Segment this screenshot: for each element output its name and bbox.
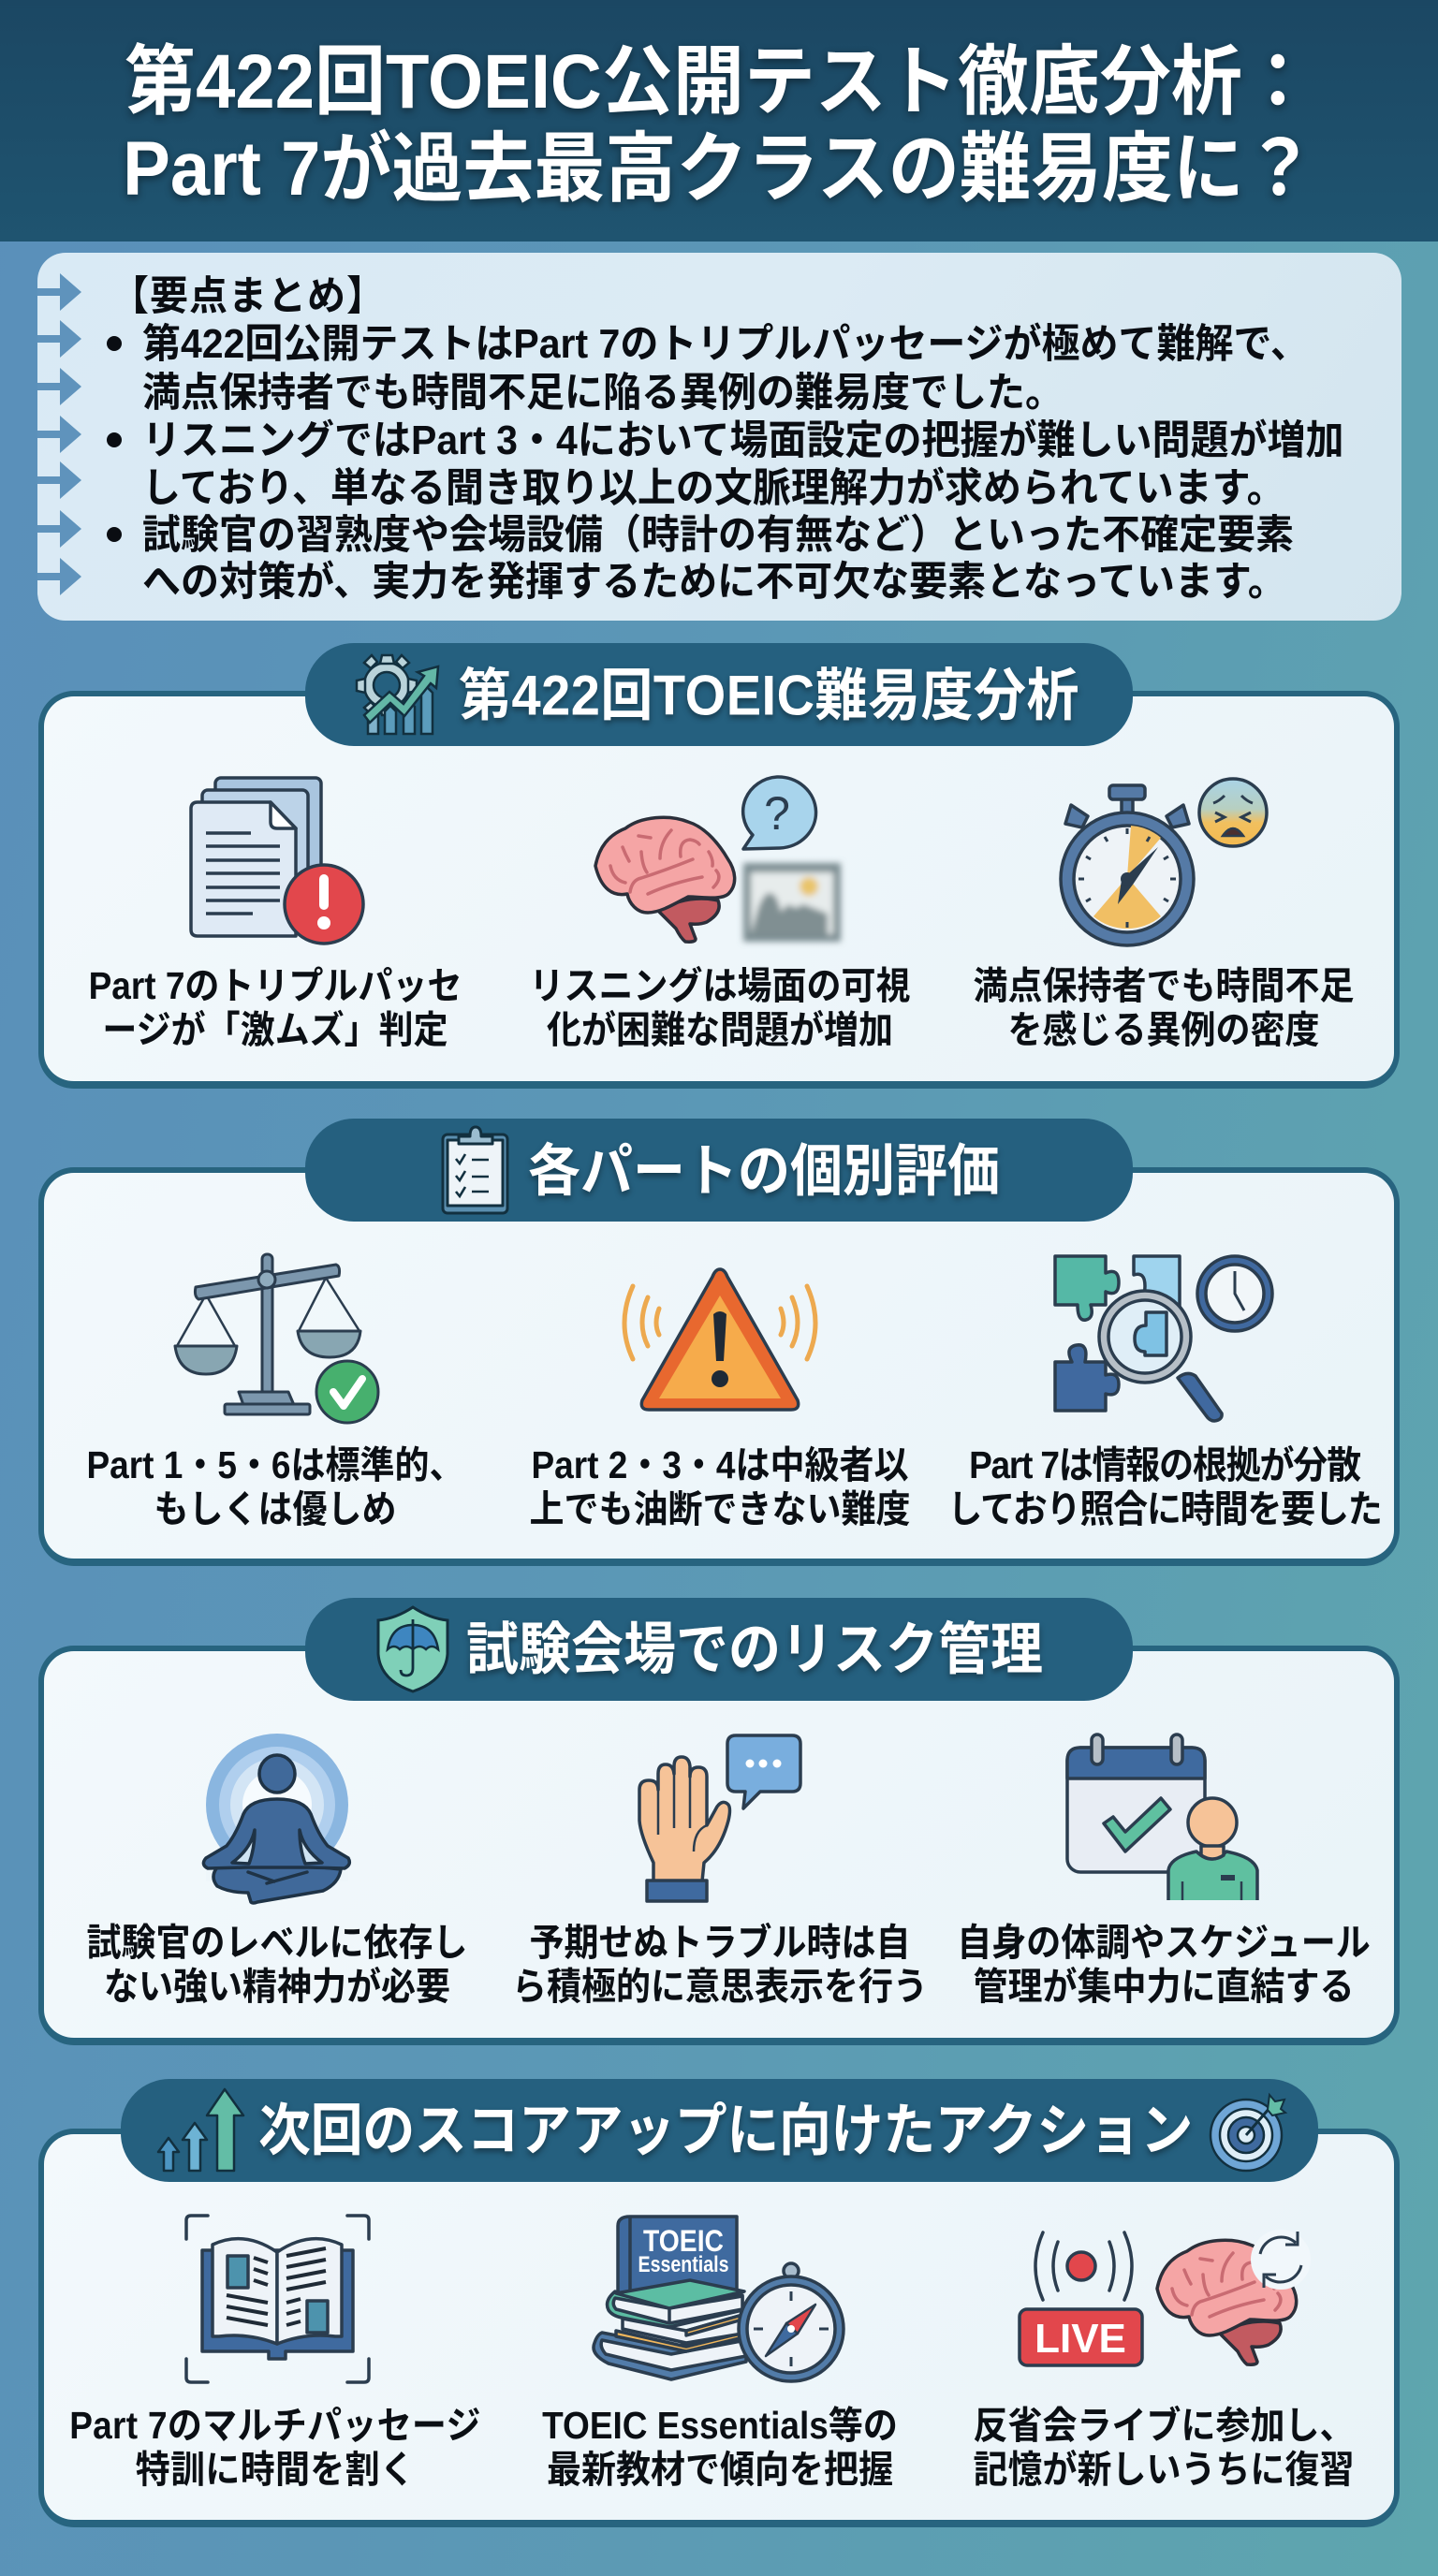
caption: TOEIC Essentials: TOEIC Essentials等の: [542, 2405, 898, 2447]
caption: health and schedule: 自身の体調やスケジュール: [957, 1922, 1371, 1964]
caption: part 7 evidence: Part 7は情報の根拠が分散: [969, 1444, 1360, 1486]
caption: health and schedule: 管理が集中力に直結する: [974, 1966, 1354, 2008]
caption: perfect scorers: 満点保持者でも時間不足: [974, 965, 1354, 1007]
caption: perfect scorers: [920, 964, 1407, 1052]
caption: TOEIC Essentials: [477, 2404, 963, 2492]
bullet 1: [107, 321, 1309, 415]
bullet 3: 試験官の習熟度や会場設備（時計の有無など）といった不確定要素: [142, 512, 1294, 557]
panel: test venue risk management: [38, 1646, 1400, 2045]
heading text: part evaluation: 各パートの個別評価: [528, 1138, 1000, 1202]
icon: live broadcast sign and brain: LIVE: [1034, 2316, 1126, 2362]
icon: stopwatch with worried face: [1059, 777, 1269, 947]
caption: parts 2 3 4: Part 2・3・4は中級者以: [532, 1444, 908, 1486]
caption: trouble: [477, 1921, 963, 2009]
panel: actions for next score-up: [38, 2129, 1400, 2527]
icon: calendar with check and person: [1063, 1730, 1264, 1908]
icon: rising arrows: [154, 2086, 246, 2174]
panel: key points summary: [37, 253, 1401, 621]
icon: TOEIC Essentials books and compass: Essentials: [638, 2252, 728, 2277]
caption: part 7 multi passage: [32, 2404, 519, 2492]
caption: review live: [920, 2404, 1407, 2492]
heading text: risk management: 試験会場でのリスク管理: [466, 1617, 1043, 1680]
icon: warning triangle with vibration lines: [618, 1264, 824, 1415]
caption: health and schedule: [920, 1921, 1407, 2009]
bullet 1: 第422回公開テストはPart 7のトリプルパッセージが極めて難解で、: [142, 321, 1309, 366]
caption: examiner level: [34, 1921, 521, 2009]
caption: review live: 記憶が新しいうちに復習: [974, 2449, 1354, 2491]
caption: listening: リスニングは場面の可視: [530, 965, 910, 1007]
header banner: [0, 0, 1438, 242]
bullet 2: リスニングではPart 3・4において場面設定の把握が難しい問題が増加: [142, 417, 1344, 462]
caption: parts 1 5 6: Part 1・5・6は標準的、: [86, 1444, 464, 1486]
bullet 2: [107, 417, 1344, 510]
icon: gear and growth chart: [356, 653, 440, 736]
caption: trouble: 予期せぬトラブル時は自: [530, 1922, 910, 1964]
bullet 3: への対策が、実力を発揮するために不可欠な要素となっています。: [142, 559, 1286, 604]
arrows on the left edge of the summary: [37, 273, 81, 595]
bullet 2: しており、単なる聞き取り以上の文脈理解力が求められています。: [142, 465, 1285, 510]
icon: raised hand with speech bubble: [632, 1730, 810, 1908]
bullet 3: [107, 512, 1294, 604]
icon: brain with question bubble and blurred picture: ?: [764, 787, 790, 840]
icon: clipboard checklist: [440, 1123, 513, 1217]
icon: target with arrow: [1206, 2087, 1290, 2174]
caption: review live: 反省会ライブに参加し、: [974, 2405, 1354, 2447]
caption: parts 1 5 6: もしくは優しめ: [154, 1488, 397, 1530]
caption: listening: 化が困難な問題が増加: [547, 1009, 893, 1051]
caption: parts 2 3 4: [477, 1443, 963, 1531]
icon: puzzle, magnifier and clock: [1049, 1250, 1278, 1423]
caption: parts 1 5 6: [32, 1443, 519, 1531]
caption: listening: [530, 965, 910, 1051]
icon: brain with question bubble and blurred picture: [594, 775, 844, 945]
caption: part 7 triple passage: ージが「激ムズ」判定: [102, 1009, 448, 1051]
caption: part 7 multi passage: 特訓に時間を割く: [136, 2449, 415, 2491]
caption: part 7 evidence: しており照合に時間を要した: [947, 1488, 1382, 1530]
caption: parts 2 3 4: 上でも油断できない難度: [530, 1488, 910, 1530]
icon: shield with umbrella: [376, 1604, 451, 1694]
heading text: actions: 次回のスコアアップに向けたアクション: [258, 2098, 1193, 2161]
icon: open book with focus brackets: [183, 2211, 374, 2389]
caption: part 7 evidence: [921, 1443, 1408, 1531]
caption: part 7 triple passage: Part 7のトリプルパッセ: [89, 965, 462, 1007]
icon: TOEIC Essentials books and compass: [592, 2211, 849, 2389]
icon: balance scale with check: [169, 1250, 389, 1427]
panel: difficulty analysis: [38, 691, 1400, 1089]
heading text: difficulty analysis: 第422回TOEIC難易度分析: [459, 663, 1079, 726]
summary heading: 【要点まとめ】: [110, 273, 386, 318]
icon: meditating person with halo: [197, 1730, 360, 1908]
caption: part 7 triple passage: [89, 965, 462, 1051]
panel: part evaluation: [38, 1167, 1400, 1566]
caption: TOEIC Essentials: 最新教材で傾向を把握: [547, 2449, 893, 2491]
heading pill: risk management: [305, 1598, 1133, 1701]
caption: examiner level: ない強い精神力が必要: [104, 1966, 450, 2008]
bullet 1: 満点保持者でも時間不足に陥る異例の難易度でした。: [142, 370, 1064, 415]
icon: live broadcast sign and brain: [1011, 2214, 1311, 2373]
icon: stacked documents with alert: [189, 776, 365, 945]
caption: part 7 multi passage: Part 7のマルチパッセージ: [69, 2405, 481, 2447]
caption: examiner level: 試験官のレベルに依存し: [86, 1922, 468, 1964]
heading pill: part evaluation: [305, 1119, 1133, 1222]
title line 1: 第422回TOEIC公開テスト徹底分析：: [125, 39, 1313, 124]
heading pill: difficulty analysis: [305, 643, 1133, 746]
caption: trouble: ら積極的に意思表示を行う: [512, 1966, 928, 2008]
icon: TOEIC Essentials books and compass: TOEIC: [643, 2224, 724, 2258]
heading pill: actions: [121, 2079, 1318, 2182]
title line 2: Part 7が過去最高クラスの難易度に？: [123, 126, 1315, 212]
caption: perfect scorers: を感じる異例の密度: [1007, 1009, 1320, 1051]
